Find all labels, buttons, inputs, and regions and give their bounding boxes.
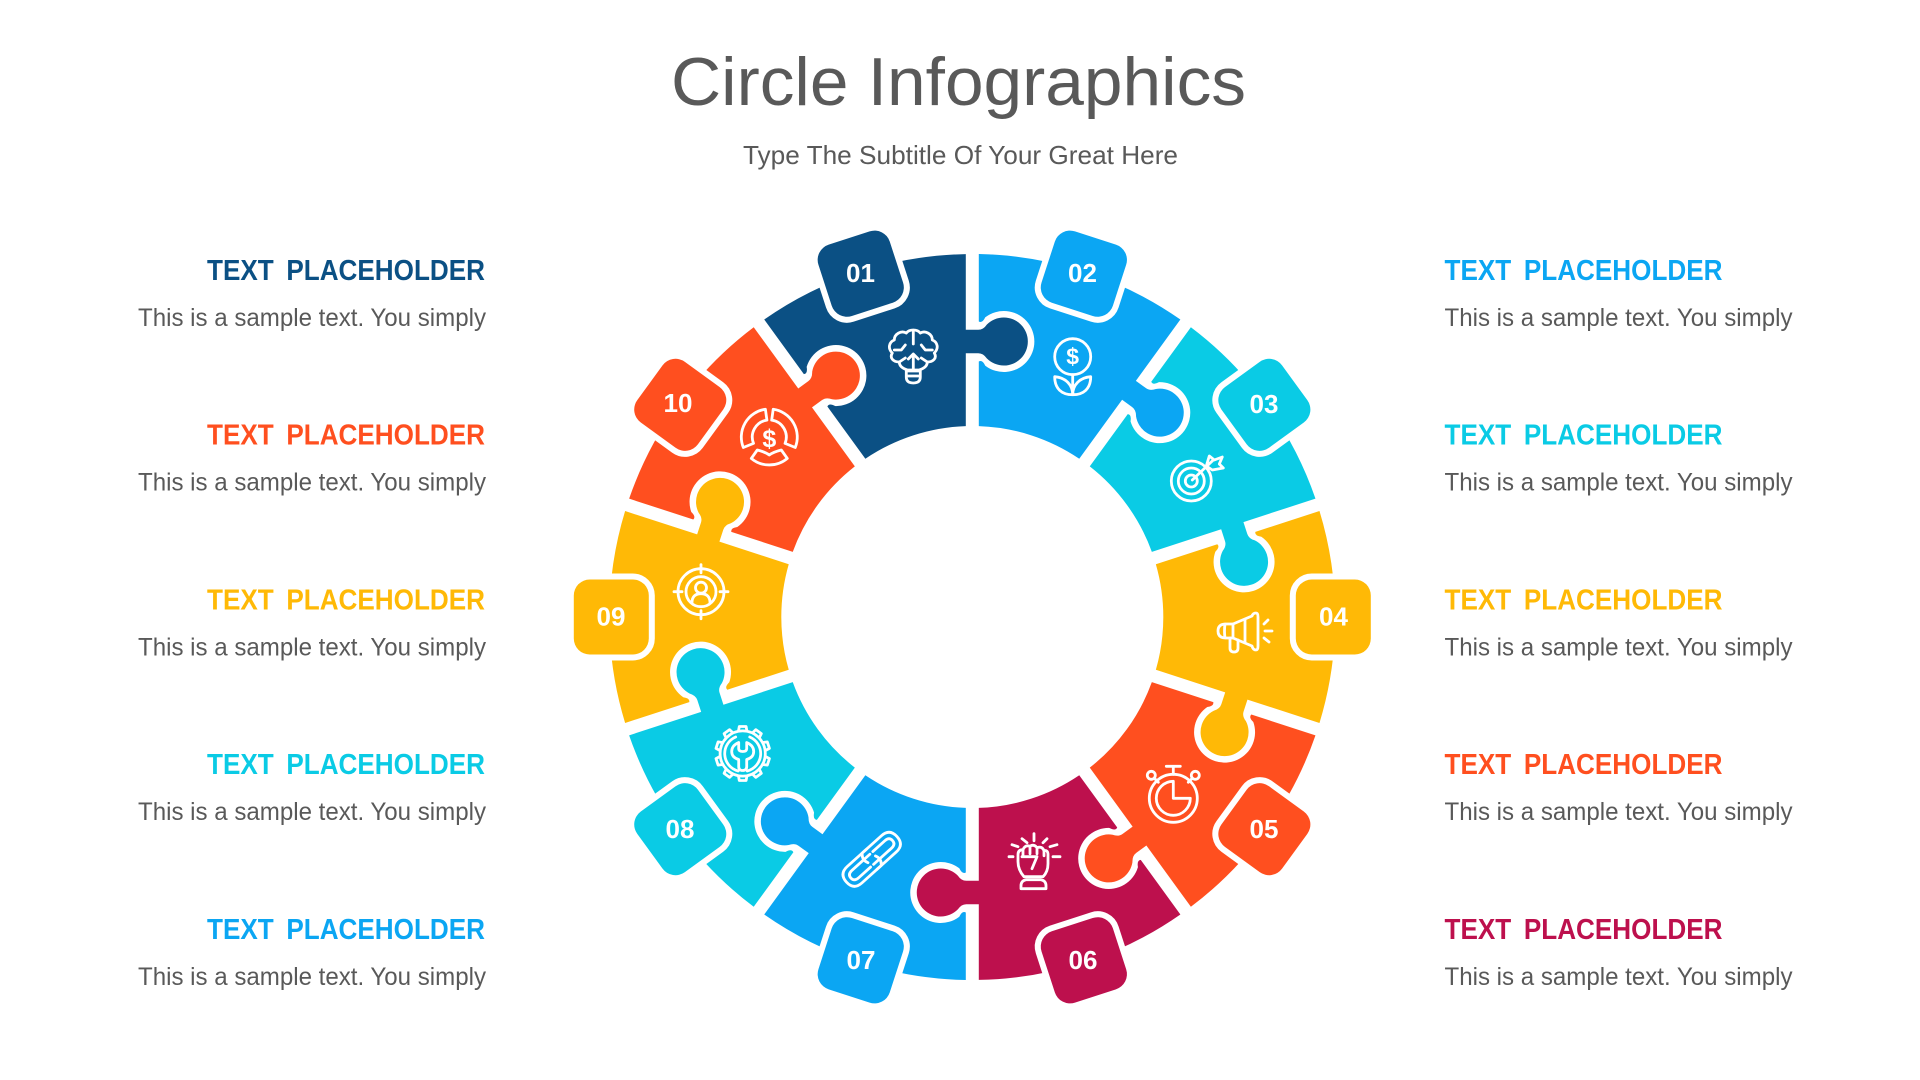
badge shape 10: [628, 352, 733, 457]
right text block 04: TEXT PLACEHOLDER: [1444, 584, 1723, 616]
puzzle piece 01: [764, 199, 1050, 485]
right text block 02: [1444, 255, 1793, 332]
icon: stopwatch: [1147, 766, 1199, 822]
right text block 06: This is a sample text. You simply: [1444, 963, 1793, 991]
left text block 07: [138, 914, 486, 991]
left text block 01: This is a sample text. You simply: [138, 304, 486, 332]
icon: megaphone: [1218, 613, 1272, 652]
left text block 09: This is a sample text. You simply: [138, 634, 486, 662]
number 02: 02: [1068, 258, 1097, 288]
number 04: 04: [1319, 602, 1348, 632]
number 09: 09: [597, 602, 625, 632]
number 03: 03: [1250, 389, 1278, 419]
puzzle piece 04: [1125, 511, 1383, 769]
icon: money plant: [1055, 339, 1091, 395]
left text block 01: TEXT PLACEHOLDER: [207, 255, 485, 287]
puzzle piece 02: [979, 254, 1184, 459]
icon: target with arrow: [1171, 456, 1223, 501]
icon: raised fist: [1009, 834, 1060, 889]
right text block 05: This is a sample text. You simply: [1444, 798, 1793, 826]
number 01: 01: [846, 258, 875, 288]
right text block 02: This is a sample text. You simply: [1444, 304, 1793, 332]
number 06: 06: [1069, 945, 1097, 975]
right text block 05: TEXT PLACEHOLDER: [1444, 749, 1723, 781]
puzzle piece 10: [629, 304, 887, 562]
number 05: 05: [1250, 814, 1278, 844]
badge shape 03: [1212, 352, 1317, 457]
left text block 10: TEXT PLACEHOLDER: [207, 420, 485, 452]
right text block 03: TEXT PLACEHOLDER: [1444, 420, 1723, 452]
puzzle piece 05: [1057, 672, 1315, 930]
left text block 10: This is a sample text. You simply: [138, 468, 486, 496]
left text block 09: TEXT PLACEHOLDER: [207, 584, 485, 616]
left text block 10: [138, 420, 486, 496]
puzzle piece 08: [588, 621, 874, 907]
puzzle piece 07: [761, 775, 966, 980]
icon: brain bulb: [889, 330, 937, 383]
number 07: 07: [847, 945, 875, 975]
right text block 05: [1444, 749, 1793, 826]
icon: dollar target: $: [762, 425, 776, 453]
icon: dollar target: [741, 409, 797, 465]
left text block 08: TEXT PLACEHOLDER: [207, 749, 485, 781]
right text block 06: [1444, 914, 1793, 991]
left text block 08: [138, 749, 486, 826]
right text block 03: This is a sample text. You simply: [1444, 468, 1793, 496]
number 08: 08: [666, 814, 694, 844]
icon: money plant: $: [1066, 344, 1079, 370]
subtitle: Type The Subtitle Of Your Great Here: [743, 140, 1178, 170]
badge shape 06: [1037, 913, 1131, 1008]
left text block 09: [138, 584, 486, 662]
badge shape 05: [1212, 777, 1317, 882]
right text block 06: TEXT PLACEHOLDER: [1444, 914, 1723, 946]
badge shape 04: [1296, 580, 1371, 654]
left text block 01: [138, 255, 486, 332]
puzzle piece 03: [1071, 327, 1357, 613]
left text block 07: TEXT PLACEHOLDER: [207, 914, 485, 946]
puzzle ring: [562, 199, 1383, 1035]
badge shape 07: [813, 913, 908, 1008]
right text block 03: [1444, 420, 1793, 496]
icon: person in crosshair: [674, 565, 728, 619]
badge shape 09: [574, 580, 649, 654]
puzzle piece 06: [894, 749, 1180, 1035]
puzzle piece 09: [562, 465, 820, 723]
right text block 04: This is a sample text. You simply: [1444, 634, 1793, 662]
left text block 08: This is a sample text. You simply: [138, 798, 486, 826]
right text block 04: [1444, 584, 1793, 662]
right text block 02: TEXT PLACEHOLDER: [1444, 255, 1723, 287]
icon: chain link: [839, 828, 904, 890]
icon: gear with wrench: [716, 726, 770, 780]
number 10: 10: [664, 388, 692, 418]
badge shape 08: [628, 777, 733, 882]
left text block 07: This is a sample text. You simply: [138, 963, 486, 991]
badge shape 02: [1037, 226, 1131, 321]
title: Circle Infographics: [671, 44, 1246, 120]
badge shape 01: [813, 226, 908, 321]
